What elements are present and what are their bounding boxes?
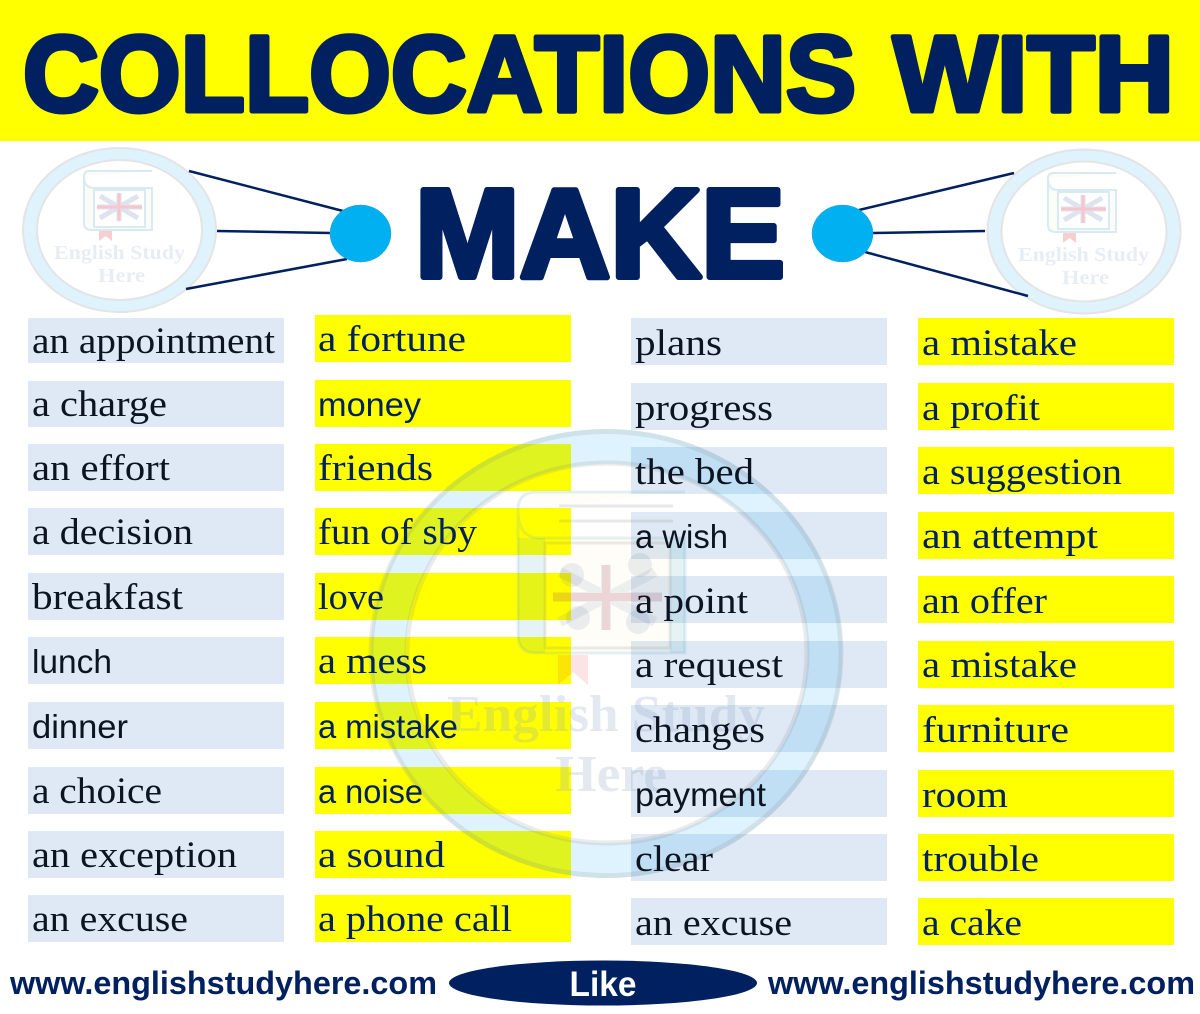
column 1 words: dinner [32, 708, 128, 745]
column 1 words: an appointment [32, 321, 276, 362]
column 4 words: a profit [922, 388, 1041, 429]
right logo watermark: Here [1062, 267, 1109, 289]
left logo watermark: Here [98, 265, 145, 287]
column 4 words: an attempt [922, 516, 1099, 557]
right connector: lines and blue dot [812, 173, 1028, 296]
footer left url: www.englishstudyhere.com [9, 965, 437, 1001]
column 2 words: fun of sby [318, 512, 478, 553]
title banner: COLLOCATIONS [23, 13, 856, 134]
column 4 words: a cake [922, 903, 1022, 944]
column 4 words: a mistake [922, 645, 1077, 686]
column 3 words: the bed [635, 452, 755, 493]
footer like badge: Like [570, 965, 636, 1004]
column 3 words [635, 323, 792, 944]
column 2 words: love [318, 577, 384, 618]
column 1 words: an exception [32, 835, 237, 876]
column 1 words: a choice [32, 771, 162, 812]
column 3 words: progress [635, 388, 773, 429]
column 1 words [32, 321, 276, 940]
column 4 words: a mistake [922, 323, 1077, 364]
column 3 words: plans [635, 323, 722, 364]
column 1 words: lunch [32, 643, 112, 680]
column 4 words: a suggestion [922, 452, 1122, 493]
left logo watermark [23, 148, 216, 312]
column 1 words: an excuse [32, 899, 188, 940]
column 2 words [318, 319, 512, 940]
column 2 words: a mistake [318, 708, 458, 745]
column 1 words: a charge [32, 384, 167, 425]
right logo watermark [988, 150, 1180, 314]
column 3 words: a wish [635, 518, 728, 555]
column 2 words: a sound [318, 835, 446, 876]
left logo watermark: English Study [54, 242, 185, 264]
column 3 words: payment [635, 776, 766, 813]
column 4 words: trouble [922, 839, 1039, 880]
column 1 words: breakfast [32, 577, 184, 618]
column 3 words: changes [635, 710, 765, 751]
column 4 words [922, 323, 1122, 944]
column 3 words: a point [635, 581, 749, 622]
column 2 words: a fortune [318, 319, 466, 360]
central logo watermark: Here [555, 746, 667, 803]
title banner [0, 0, 1200, 141]
left connector: lines and blue dot [186, 171, 391, 289]
column 3 words: a request [635, 645, 784, 686]
column 2 words: friends [318, 448, 433, 489]
column 3 words: clear [635, 839, 713, 880]
column 1 words: a decision [32, 512, 193, 553]
row backgrounds for the four columns [28, 315, 1174, 945]
column 3 words: an excuse [635, 903, 792, 944]
central logo watermark: English Study [447, 686, 765, 743]
title banner: WITH [893, 13, 1174, 134]
column 2 words: a noise [318, 773, 423, 810]
heading: make: MAKE [415, 163, 785, 304]
footer right url: www.englishstudyhere.com [767, 965, 1195, 1001]
column 1 words: an effort [32, 448, 171, 489]
column 2 words: a mess [318, 641, 427, 682]
column 4 words: an offer [922, 581, 1047, 622]
footer like badge [449, 960, 757, 1006]
central logo watermark [371, 432, 841, 876]
column 4 words: room [922, 775, 1008, 816]
column 2 words: a phone call [318, 899, 512, 940]
column 2 words: money [318, 386, 422, 423]
column 4 words: furniture [922, 710, 1069, 751]
right logo watermark: English Study [1018, 244, 1149, 266]
